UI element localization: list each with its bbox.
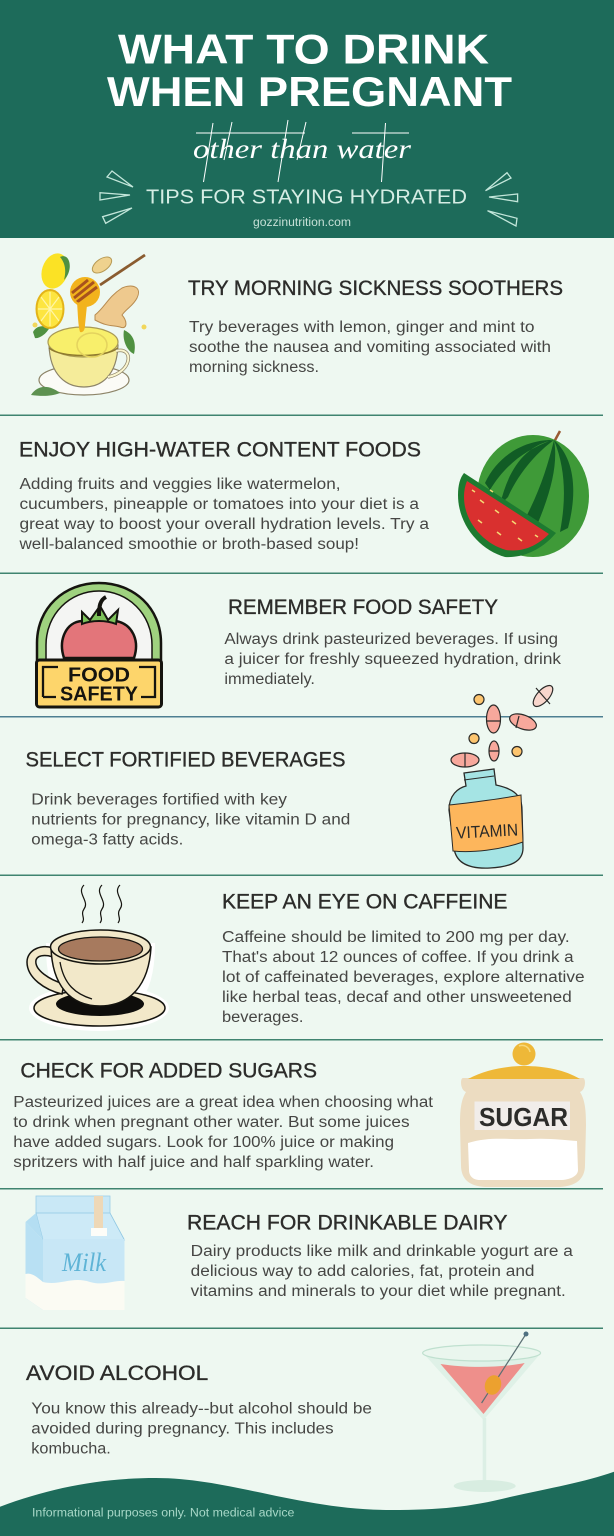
script subtitle	[193, 120, 412, 182]
icon: food safety badge	[36, 583, 162, 707]
body text: a juicer for freshly squeezed hydration, drink	[224, 651, 561, 668]
body text: immediately.	[224, 671, 315, 688]
body text: Always drink pasteurized beverages. If using	[224, 631, 558, 648]
title: WHEN PREGNANT	[107, 68, 512, 115]
icon: vitamin bottle	[449, 682, 556, 868]
icon: vitamin bottle: VITAMIN	[456, 820, 519, 843]
title: WHAT TO DRINK	[118, 26, 489, 72]
heading: REACH FOR DRINKABLE DAIRY	[187, 1211, 508, 1234]
heading: CHECK FOR ADDED SUGARS	[20, 1059, 317, 1082]
icon: food safety badge: FOOD	[68, 664, 130, 686]
icon: coffee cup	[27, 885, 169, 1031]
body text: spritzers with half juice and half sparkling water.	[13, 1154, 374, 1171]
body text: morning sickness.	[189, 359, 319, 376]
body text	[31, 1400, 372, 1457]
header banner	[0, 0, 614, 238]
body text: have added sugars. Look for 100% juice or making	[13, 1134, 394, 1151]
body text	[224, 631, 561, 688]
body text	[222, 929, 585, 1026]
icon: martini glass	[423, 1332, 541, 1492]
body text: Dairy products like milk and drinkable yogurt are a	[191, 1243, 573, 1260]
panel: fortified beverages	[26, 682, 556, 868]
heading: TRY MORNING SICKNESS SOOTHERS	[188, 277, 563, 300]
heading: AVOID ALCOHOL	[26, 1362, 208, 1385]
panel: food safety	[36, 583, 561, 707]
icon: sugar jar	[460, 1042, 586, 1187]
body text	[13, 1094, 434, 1171]
body text: Try beverages with lemon, ginger and mint to	[189, 319, 534, 336]
body text	[18, 476, 429, 553]
title	[107, 26, 512, 115]
icon: watermelon	[458, 431, 589, 557]
disclaimer: Informational purposes only. Not medical advice	[32, 1508, 294, 1520]
subtitle: TIPS FOR STAYING HYDRATED	[146, 186, 467, 208]
footer wave	[0, 1472, 614, 1536]
panel: added sugars	[13, 1042, 586, 1187]
body text: delicious way to add calories, fat, protein and	[191, 1263, 534, 1280]
body text: like herbal teas, decaf and other unsweetened	[222, 989, 572, 1006]
body text: avoided during pregnancy. This includes	[31, 1420, 334, 1437]
panel: caffeine	[27, 885, 585, 1031]
body text	[191, 1243, 573, 1300]
icon: left rays	[100, 171, 133, 223]
panel: high-water foods	[18, 431, 589, 557]
body text: great way to boost your overall hydration levels. Try a	[20, 516, 429, 533]
icon: sugar jar: SUGAR	[479, 1102, 568, 1132]
body text: You know this already--but alcohol should be	[31, 1400, 372, 1417]
body text: kombucha.	[31, 1440, 111, 1457]
panel: avoid alcohol	[26, 1332, 541, 1492]
body text: Caffeine should be limited to 200 mg per day.	[222, 929, 570, 946]
icon: lemon ginger tea	[31, 250, 146, 396]
body text: lot of caffeinated beverages, explore alternative	[222, 969, 585, 986]
body text	[31, 791, 350, 848]
heading: SELECT FORTIFIED BEVERAGES	[26, 749, 346, 772]
body text: Drink beverages fortified with key	[31, 791, 287, 808]
website: gozzinutrition.com	[253, 217, 351, 229]
script subtitle: other than water	[193, 134, 412, 164]
body text: omega-3 fatty acids.	[31, 831, 183, 848]
body text: soothe the nausea and vomiting associated with	[189, 339, 551, 356]
icon: right rays	[486, 173, 518, 226]
body text: well-balanced smoothie or broth-based soup!	[18, 536, 359, 553]
icon: milk carton	[26, 1196, 124, 1310]
icon: milk carton: Milk	[61, 1248, 106, 1277]
icon: food safety badge: SAFETY	[60, 684, 139, 706]
body text: beverages.	[222, 1009, 303, 1026]
heading: REMEMBER FOOD SAFETY	[228, 596, 498, 619]
panel: morning sickness soothers	[31, 250, 563, 396]
heading: ENJOY HIGH-WATER CONTENT FOODS	[19, 439, 421, 462]
body text: That's about 12 ounces of coffee. If you drink a	[222, 949, 574, 966]
body text	[189, 319, 551, 376]
body text: to drink when pregnant other water. But some juices	[13, 1114, 410, 1131]
heading: KEEP AN EYE ON CAFFEINE	[222, 890, 508, 913]
body text: Pasteurized juices are a great idea when choosing what	[13, 1094, 434, 1111]
body text: vitamins and minerals to your diet while pregnant.	[191, 1283, 566, 1300]
body text: Adding fruits and veggies like watermelon,	[20, 476, 340, 493]
panel: drinkable dairy	[26, 1196, 573, 1310]
body text: nutrients for pregnancy, like vitamin D and	[31, 811, 350, 828]
body text: cucumbers, pineapple or tomatoes into your diet is a	[20, 496, 419, 513]
